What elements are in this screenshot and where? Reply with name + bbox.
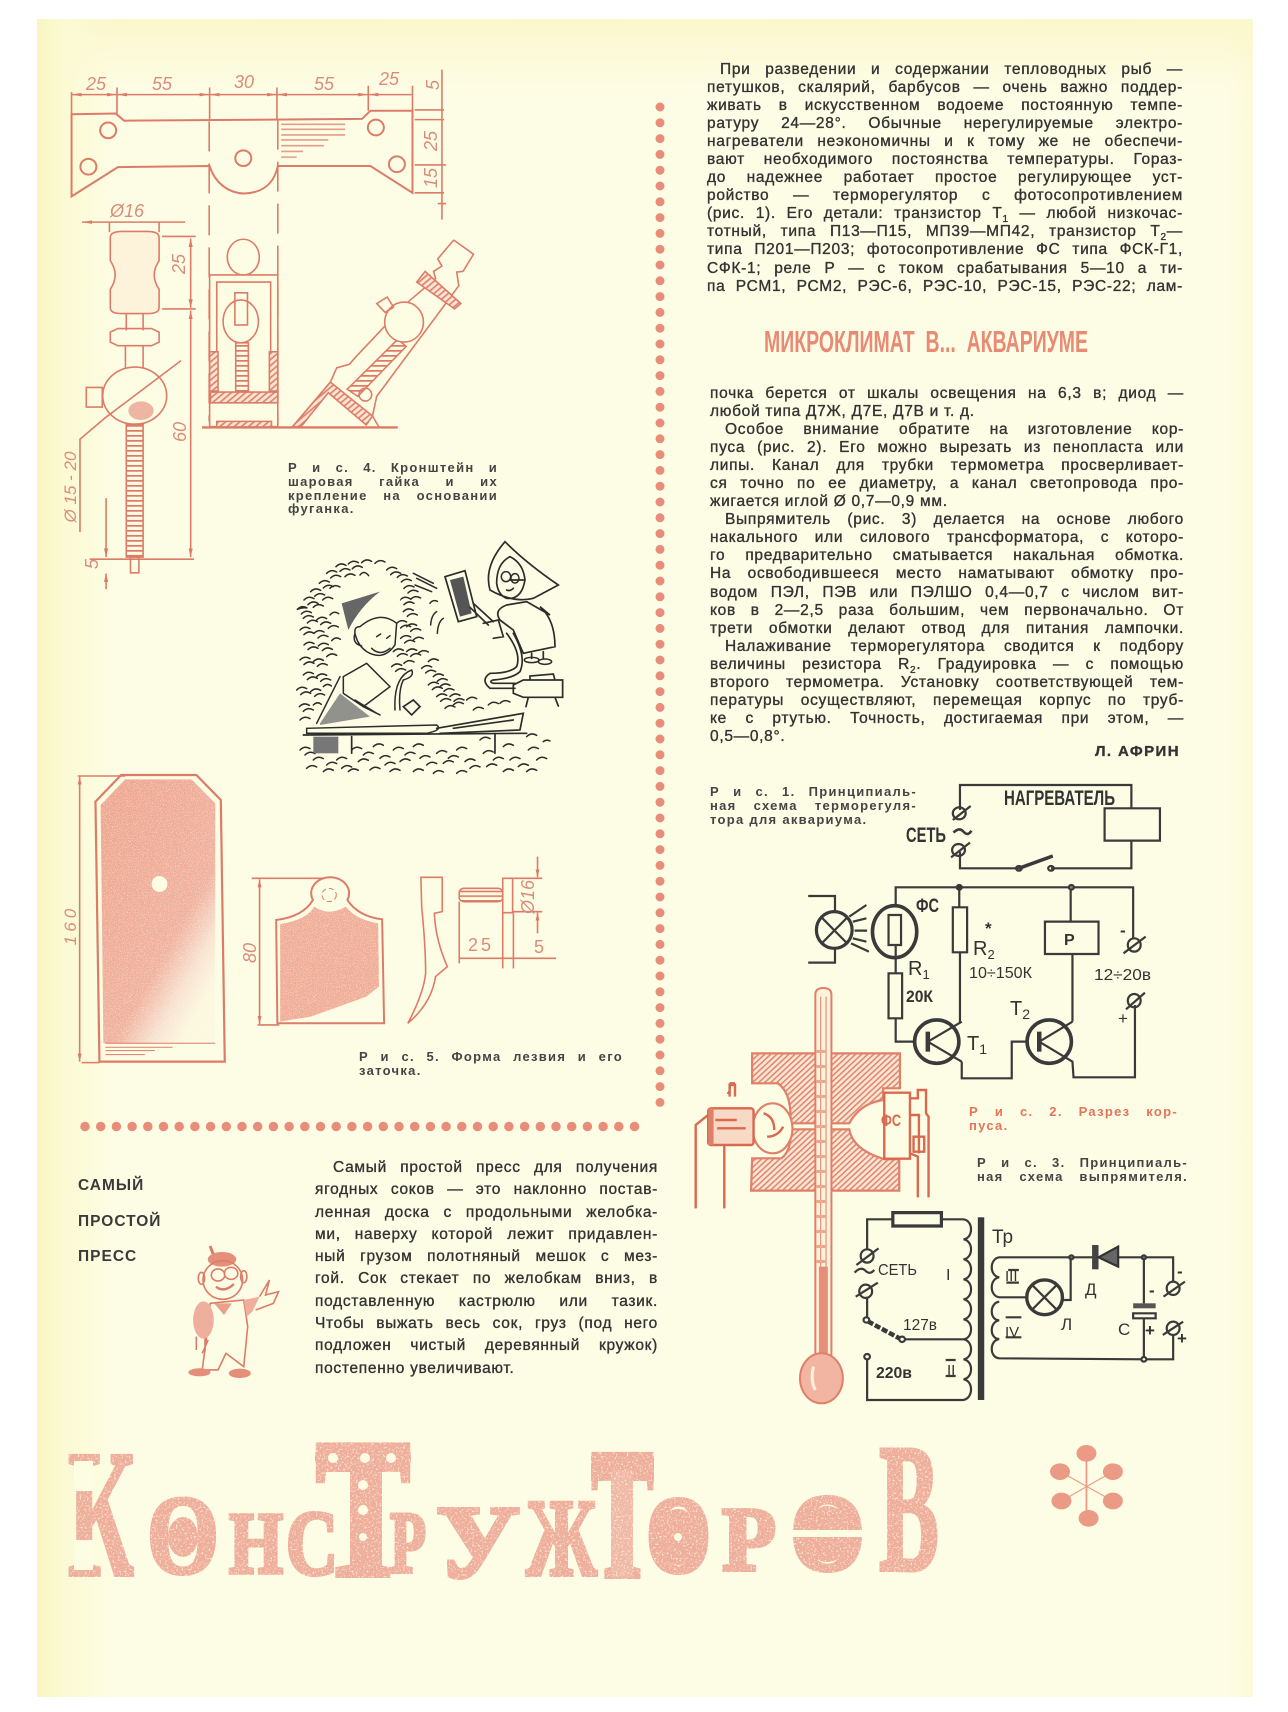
circuit labels: 2 [1022, 1006, 1030, 1022]
blade dimension numbers: 80 [240, 943, 260, 963]
blade dimension numbers [61, 879, 544, 963]
bracket dimension numbers: 25 [85, 74, 107, 94]
caption: figure 2: Р и с. 2. Разрез кор- [969, 1104, 1178, 1119]
circuit labels: T [967, 1033, 979, 1055]
vertical dotted divider [656, 107, 664, 1108]
caption: figure 5: заточка. [359, 1063, 422, 1078]
text block: article opening: тотный, типа П13—П15, МП39—МП42, транзистор Т2— [707, 223, 1183, 244]
secondary windings [992, 1257, 1173, 1359]
text block: article opening: до надежнее работает простое регулирующее уст- [707, 169, 1183, 186]
large title: constructors [68, 1398, 939, 1620]
large title: constructors: У [436, 1485, 520, 1600]
circuit labels: 1 [979, 1041, 987, 1057]
text block: simplest press: ми, наверху которой лежит придавлен- [315, 1226, 658, 1243]
rectifier labels: + [1177, 1329, 1187, 1348]
rectifier labels: + [1145, 1321, 1155, 1340]
circuit labels: НАГРЕВАТЕЛЬ [1004, 787, 1115, 810]
rectifier labels: I [946, 1267, 950, 1284]
text block: simplest press [314, 1159, 658, 1377]
text block: article continuation: Особое внимание обратите на изготовление кор- [725, 421, 1184, 438]
horizontal dotted divider [85, 1122, 645, 1131]
figure 4: bracket and ball nut drawing [61, 69, 474, 589]
rectifier labels: Л [1061, 1315, 1072, 1334]
vacuum [485, 633, 563, 707]
text block: article continuation: любой типа Д7Ж, Д7Е, Д7В и т. д. [710, 403, 975, 420]
text block: article continuation: На освободившееся место наматывают обмотку про- [710, 565, 1184, 582]
text block: simplest press: подложен чистый деревянный кружок) [315, 1337, 658, 1354]
figure 1 and 2: thermostat circuit and body section [808, 785, 1160, 1078]
text block: article opening: па РСМ1, РСМ2, РЭС-6, РЭС-10, РЭС-15, РЭС-22; лам- [707, 278, 1183, 295]
thermometer [800, 988, 843, 1403]
shavings [297, 560, 510, 720]
transformer core [978, 1217, 984, 1400]
circuit labels: + [1118, 1009, 1128, 1028]
figure 3: rectifier circuit [855, 1213, 1187, 1400]
boy [354, 617, 397, 655]
rectifier labels: 127в [903, 1317, 937, 1334]
lamp and photoresistor [808, 887, 1133, 963]
bracket dimension numbers: 25 [378, 69, 400, 89]
text block: article continuation: водом ПЭЛ, ПЭВ или ПЭЛШО 0,4—0,7 с числом вит- [710, 584, 1184, 601]
body section labels [727, 1081, 901, 1130]
text block: article continuation [710, 385, 1184, 745]
bracket dimension numbers: 55 [152, 74, 173, 94]
resistor R2 and relay [959, 887, 1072, 1023]
large title: constructors: Т [315, 1398, 411, 1620]
figure 2: thermometer in hatched body section [696, 988, 929, 1403]
text block: simplest press: гой. Сок стекает по желобкам вниз, в [315, 1270, 658, 1287]
diode [1092, 1245, 1099, 1269]
ball nut front view in base [202, 239, 398, 427]
circuit labels: 1 [922, 967, 930, 982]
text block: simplest press: постепенно увеличивают. [315, 1360, 514, 1377]
medium blade [276, 877, 384, 1023]
figure 5: blade shape drawing [61, 775, 556, 1063]
text block: article opening: ройство — терморегулятор с фотосопротивлением [707, 187, 1183, 204]
text block: article continuation: величины резистора R2. Градуировка — с помощью [710, 656, 1184, 676]
bracket dimension numbers: 30 [234, 72, 254, 92]
rectifier labels: СЕТЬ [878, 1262, 917, 1279]
rectifier labels: - [1149, 1281, 1155, 1300]
heater loop [960, 785, 1131, 868]
text block: article continuation: ся точно по ее диаметру, а канал светопровода про- [710, 475, 1184, 492]
side heading: simplest press: САМЫЙ [78, 1177, 144, 1194]
large title: constructors: Р [390, 1495, 426, 1592]
caption: figure 1: ная схема терморегуля- [710, 798, 917, 813]
text block: article opening: живать в искусственном водоеме постоянную темпе- [707, 97, 1183, 114]
bracket dimension numbers: 15 [421, 167, 441, 188]
text block: article continuation: го предварительно сматывается накальная обмотка. [710, 547, 1184, 564]
text block: article continuation: трети обмотки делают отвод для питания лампочки. [710, 620, 1184, 637]
circuit labels [906, 787, 1151, 1057]
circuit labels: R [908, 958, 922, 980]
text block: article opening: типа П201—П203; фотосопротивление ФС типа ФСК-Г1, [707, 241, 1183, 258]
ball nut side view [80, 222, 196, 589]
mounting bolt [459, 857, 556, 968]
output terminals [1167, 1282, 1180, 1295]
large blade [95, 775, 225, 1062]
text block: article continuation: 0,5—0,8°. [710, 728, 785, 745]
circuit labels: 2 [987, 947, 995, 962]
lamp [696, 1083, 783, 1208]
body section labels: ФС [881, 1111, 901, 1130]
caption: figure 4: Р и с. 4. Кронштейн и [288, 460, 498, 475]
large title: constructors: О [147, 1474, 219, 1598]
hatched body [751, 1053, 900, 1191]
bracket dimension numbers: Ø16 [109, 201, 145, 221]
bracket dimension numbers: 5 [82, 558, 102, 569]
large title: constructors: О [790, 1472, 865, 1594]
caption: figure 2: пуса. [969, 1118, 1008, 1133]
rectifier labels: II [947, 1362, 955, 1379]
blade dimension numbers: 160 [61, 905, 80, 945]
caption: figure 4: крепление на основании [288, 488, 498, 503]
text block: article opening: СФК-1; реле Р — с током срабатывания 5—10 а ти- [707, 260, 1183, 277]
bracket outline [72, 111, 412, 196]
text block: article opening [706, 61, 1183, 295]
large title: constructors: Ж [526, 1477, 597, 1599]
caption: figure 5: Р и с. 5. Форма лезвия и его [359, 1049, 623, 1064]
circuit labels: Р [1064, 932, 1075, 949]
caption: figure 3 [977, 1155, 1188, 1184]
drawings layer: В [879, 1406, 939, 1610]
circuit labels: * [985, 919, 992, 938]
caption: figure 5 [359, 1049, 623, 1078]
text block: article continuation: почка берется от шкалы освещения на 6,3 в; диод — [710, 385, 1184, 402]
caption: figure 3: ная схема выпрямителя. [977, 1169, 1188, 1184]
rectifier labels [876, 1227, 1187, 1382]
rectifier labels: С [1118, 1320, 1130, 1339]
large title: constructors: Т [591, 1409, 654, 1618]
text block: article opening: вают необходимого постоянства температуры. Гораз- [707, 151, 1183, 168]
circuit labels: - [1120, 921, 1126, 940]
character: man in overalls [188, 1246, 279, 1378]
rectifier labels: Д [1085, 1280, 1097, 1299]
caption: figure 4: шаровая гайка и их [288, 474, 498, 489]
rectifier labels: III [1005, 1268, 1018, 1285]
text block: article continuation: липы. Канал для трубки термометра просверливает- [710, 457, 1184, 474]
rectifier labels: Тр [992, 1227, 1013, 1248]
text block: article continuation: Налаживание терморегулятора сводится к подбору [725, 638, 1184, 655]
circuit labels: СЕТЬ [906, 824, 946, 847]
icon: molecule snowflake emblem [1050, 1445, 1123, 1527]
text block: simplest press: подставленную кастрюлю или тазик. [315, 1293, 658, 1310]
bracket dimension numbers [61, 69, 443, 569]
bracket dimensions [72, 70, 446, 421]
text block: simplest press: Чтобы выжать весь сок, груз (под него [315, 1315, 658, 1332]
text block: article opening: (рис. 1). Его детали: транзистор Т1 — любой низкочас- [707, 205, 1183, 225]
author signature: Л. АФРИН [1095, 743, 1180, 760]
circuit labels: ФС [916, 896, 939, 917]
large title: constructors: О [646, 1474, 711, 1596]
circuit labels: 20К [906, 987, 934, 1006]
bracket dimension numbers: 5 [423, 79, 443, 90]
blade dimensions [78, 776, 323, 1063]
text block: article continuation: Выпрямитель (рис. 3) делается на основе любого [725, 511, 1184, 528]
cartoon: boy planing under shavings with girl and vacuum [297, 542, 563, 773]
circuit labels: T [1010, 998, 1022, 1020]
blade dimension numbers: Ø16 [518, 879, 538, 915]
blade dimension numbers: 5 [534, 937, 544, 957]
circuit labels: R [973, 938, 987, 960]
bracket dimension numbers: 60 [170, 422, 190, 442]
large title: constructors: К [68, 1414, 134, 1615]
caption: figure 4: фуганка. [288, 501, 355, 516]
text block: simplest press: ленная доска с продольными желобка- [315, 1204, 658, 1221]
text block: simplest press: Самый простой пресс для получения [333, 1159, 658, 1176]
text block: article continuation: ке с ртутью. Точность, достигаемая при этом, — [710, 710, 1184, 727]
photoresistor block [884, 1090, 929, 1197]
text block: simplest press: ягодных соков — это наклонно постав- [315, 1181, 658, 1198]
text block: article opening: При разведении и содержании тепловодных рыб — [720, 61, 1183, 78]
large title: constructors: Р [722, 1489, 776, 1590]
rectifier labels: 220в [876, 1365, 912, 1382]
hair clearing [362, 578, 401, 612]
side heading: simplest press [78, 1176, 161, 1265]
supply terminals [1128, 938, 1141, 952]
bracket dimension numbers: Ø 15 - 20 [61, 451, 80, 523]
large title: constructors: Н [229, 1496, 283, 1593]
circuit labels: 12÷20в [1094, 967, 1151, 984]
side heading: simplest press: ПРЕСС [78, 1248, 137, 1265]
side heading: simplest press: ПРОСТОЙ [78, 1212, 161, 1230]
rectifier labels: - [1177, 1262, 1183, 1281]
text block: article continuation: жигается иглой Ø 0,7—0,9 мм. [710, 493, 948, 510]
caption: figure 2 [969, 1104, 1178, 1133]
text block: simplest press: ный грузом полотняный мешок с мез- [315, 1248, 658, 1265]
bracket dimension numbers: 25 [421, 130, 441, 152]
circuit labels: 10÷150К [969, 965, 1033, 982]
text block: article opening: петушков, скалярий, барбусов — очень важно поддер- [707, 79, 1183, 96]
text block: article continuation: пуса (рис. 2). Его можно вырезать из пенопласта или [710, 439, 1184, 456]
transistors [915, 1020, 959, 1063]
text block: article opening: ратуру 24—28°. Обычные нерегулируемые электро- [707, 115, 1183, 132]
caption: figure 3: Р и с. 3. Принципиаль- [977, 1155, 1188, 1170]
body section labels: Л [727, 1081, 737, 1097]
caption: figure 1: Р и с. 1. Принципиаль- [710, 784, 917, 799]
caption: figure 1 [710, 784, 917, 827]
bracket dimension numbers: 55 [314, 74, 335, 94]
blade profile [408, 877, 447, 1023]
girl [488, 542, 558, 658]
rectifier labels: IV [1005, 1324, 1019, 1341]
ball nut mounted at an angle [293, 240, 474, 427]
text block: article continuation: пературы осуществляют, перемещая корпус по труб- [710, 692, 1184, 709]
text block: article continuation: второго термометра. Установку соответствующей тем- [710, 674, 1184, 691]
bracket dimension numbers: 25 [169, 253, 189, 275]
text block: article continuation: накального или силового трансформатора, с которо- [710, 529, 1184, 546]
text block: article continuation: ков в 2—2,5 раза большим, чем первоначально. От [710, 602, 1184, 619]
heading: microclimate in aquarium: МИКРОКЛИМАТ В... АКВАРИУМЕ [764, 324, 1088, 359]
text block: article opening: нагреватели неэкономичны и к тому же не обеспечи- [707, 133, 1183, 150]
primary winding [867, 1219, 971, 1400]
large title: constructors: С [286, 1492, 338, 1594]
caption: figure 1: тора для аквариума. [710, 812, 867, 827]
blade dimension numbers: 25 [468, 935, 494, 955]
caption: figure 4 [288, 460, 498, 516]
capacitor [1133, 1303, 1156, 1308]
